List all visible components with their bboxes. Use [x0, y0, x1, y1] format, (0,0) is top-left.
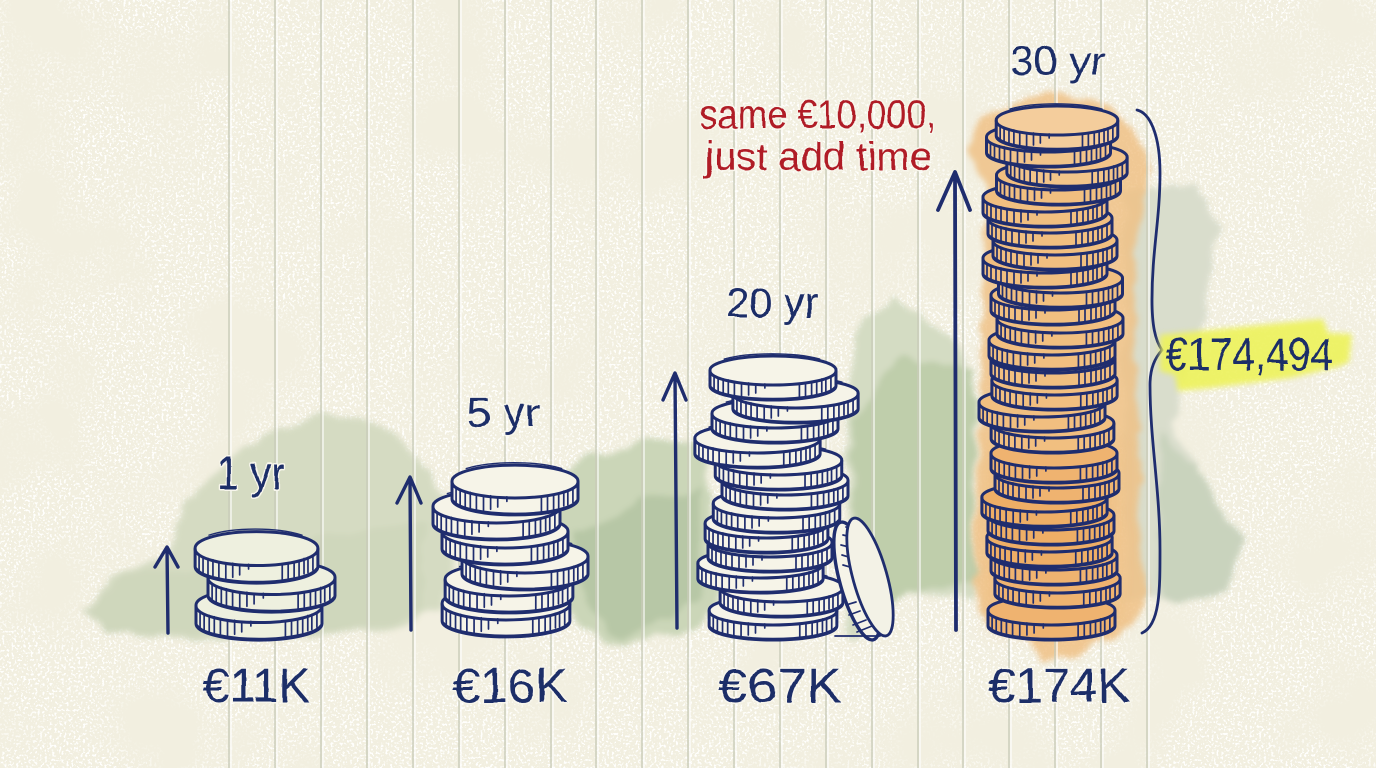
arrow: 5 yr growth — [397, 477, 421, 630]
column: 5 yr — [397, 389, 588, 713]
bracket around 30 yr stack — [1137, 110, 1162, 633]
coin stack: 5 yr — [433, 463, 588, 637]
highlighter mark — [1160, 319, 1352, 391]
arrow: 30 yr growth — [938, 172, 970, 630]
total value: €174,494 — [1165, 328, 1333, 380]
orange watercolor wash behind 30 yr stack — [968, 90, 1150, 660]
value: €174K: €174K — [988, 660, 1130, 713]
icon: leaning coin — [824, 514, 903, 644]
coin stack: 1 yr — [195, 529, 335, 640]
label: 20 yr: 20 yr — [726, 279, 818, 326]
column: 30 yr — [938, 37, 1130, 713]
column: 1 yr — [155, 447, 335, 713]
label: 30 yr: 30 yr — [1010, 37, 1105, 84]
coin stack: 30 yr — [979, 104, 1127, 640]
coin stack: 20 yr — [695, 354, 858, 640]
label: 1 yr: 1 yr — [217, 447, 285, 499]
arrow: 20 yr growth — [663, 373, 686, 628]
annotation: same €10,000, just add time: just add time — [704, 135, 932, 179]
annotation: same €10,000, just add time: same €10,000, — [700, 93, 936, 137]
value: €11K: €11K — [203, 660, 310, 713]
value: €67K: €67K — [718, 660, 842, 713]
annotation: same €10,000, just add time — [700, 93, 936, 179]
callout: total €174,494 with highlighter — [1160, 319, 1352, 391]
value: €16K: €16K — [453, 660, 568, 713]
arrow: 1 yr growth — [155, 547, 178, 633]
label: 5 yr: 5 yr — [467, 389, 540, 436]
green watercolor wash — [80, 185, 1245, 648]
column: 20 yr — [663, 279, 903, 713]
